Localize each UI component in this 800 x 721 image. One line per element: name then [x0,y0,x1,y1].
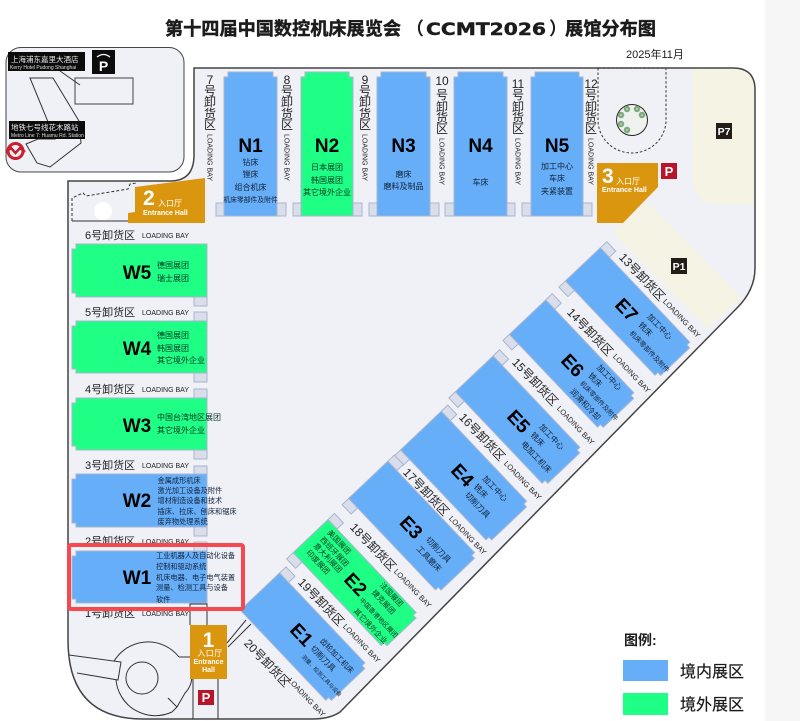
hall E1: 切削刀具 [309,643,338,673]
parking area P1: P1 [673,261,686,273]
hotel label: Kerry Hotel Pudong Shanghai [10,65,76,71]
entrance hall 3: 入口厅 [616,177,640,186]
title: （ [406,19,424,39]
loading bay 12: 区 [585,122,597,136]
east lane labels: 18号卸货区 [347,520,399,574]
panel: venue floor outline [68,68,755,719]
loading bay 9: 号 [359,84,371,98]
loading bay 9: 货 [359,106,371,121]
east lane labels: LOADING BAY [286,676,327,719]
walkway dashed route [72,183,137,221]
hall W2: 激光加工设备及附件 [158,486,222,495]
hall W2: 金属成形机床 [158,476,201,485]
west lane labels: 2号卸货区 [85,534,135,548]
hall W1: 机床电器、电子电气装置 [156,573,235,582]
loading bay 8 [281,73,293,181]
hall E6: 机床零部件及附件 [578,379,621,423]
metro label: Metro Line 7: Huamu Rd. Station [11,133,84,139]
plaza with dashed boundary [598,68,666,153]
hall E3 [342,455,484,599]
loading bay 11: LOADING BAY [514,138,522,185]
hall N2: 其它境外企业 [303,187,351,197]
loading bay 10: 号 [436,88,448,102]
hall E6 [503,294,646,440]
loading bay 7: 卸 [204,94,216,109]
loading bay 9: 区 [359,118,371,132]
hall N5: N5 [545,136,570,157]
east lane labels: 13号卸货区 [616,250,668,304]
hall N4: 车床 [472,177,488,187]
callout: red highlight around W1 [69,545,243,609]
hall W4: W4 [123,339,152,360]
entrance hall 3: Entrance Hall [602,187,647,194]
hall W4: 韩国展团 [157,343,189,353]
loading bay 9: 卸 [359,94,371,109]
icon: parking near entrance 3: P [665,164,674,179]
hall N4: N4 [468,136,493,157]
legend: 图例: [624,632,657,648]
hall N5: 夹紧装置 [541,186,573,196]
entrance hall 2: 2 [143,187,155,210]
loading bay 12: 货 [585,110,597,125]
hall W2: 插床、拉床、刨床和锯床 [158,507,237,516]
east lane labels: LOADING BAY [341,622,382,665]
hall E4: 铣床 [472,482,490,500]
loading bay 8: 货 [281,106,293,121]
east lane labels: LOADING BAY [447,514,488,557]
hall W3: W3 [123,416,151,437]
hall E2: E2 [339,569,371,601]
loading bay 7: 区 [204,118,216,132]
hall W1: 测量、检测工具与设备 [156,583,228,592]
loading bay 8: LOADING BAY [282,134,292,181]
title [165,18,656,40]
loading bay 11: 区 [512,122,524,136]
east lane labels: 17号卸货区 [400,465,452,519]
hall E6: 润滑和冷却 [568,386,603,422]
east lane labels: 20号卸货区 [241,636,293,690]
loading bay 12 [584,77,598,185]
hall E5: 加工中心 [537,422,566,452]
entrance hall 2: 入口厅 [158,199,182,208]
east lane labels [241,250,702,719]
hall E7: 加工中心 [645,311,674,342]
icon: parking near entrance 1: P [202,690,211,705]
hall E7: 铣床 [636,320,655,338]
legend: 境内展区 [680,662,744,681]
hall N1 [223,72,278,216]
east lane labels: 15号卸货区 [509,355,561,409]
entrance hall 2: Entrance Hall [143,210,188,217]
hall W5: 瑞士展团 [157,273,189,283]
hall E3: 工具磨床 [415,543,444,574]
loading bay 11 [512,77,525,185]
loading bay 10: 货 [436,110,448,125]
hall W2: 增材制造设备和技术 [158,496,222,505]
loading bay 10: 10 [435,74,449,88]
hotel label: 上海浦东嘉里大酒店 [11,54,79,64]
entrance hall 1: 入口厅 [197,649,223,658]
hall E4: 加工中心 [480,473,510,503]
loading bay 11: 号 [512,88,524,102]
west lane labels: LOADING BAY [142,537,189,546]
title: CCMT2026 [426,20,546,40]
icon: metro logo [6,144,25,158]
hall E2: 意大利展团 [312,541,345,575]
hall E6: 加工中心 [595,362,624,392]
east lane labels: LOADING BAY [661,297,702,340]
legend: 境外展区 [680,695,744,714]
legend [623,632,744,715]
hall E5: 电加工机床 [519,439,554,475]
loading bay 10: 卸 [436,99,448,114]
parking area P7: P7 [718,126,731,138]
hall N1: 镗床 [242,169,258,179]
west lane labels: 5号卸货区 [85,305,135,319]
east lane labels: LOADING BAY [555,404,596,447]
hall W1: W1 [123,568,152,589]
loading bay 8: 卸 [281,94,293,109]
title: ） [549,19,567,39]
loading bay 9: LOADING BAY [360,134,370,181]
parking area P7 [692,69,754,205]
west lane labels: LOADING BAY [142,231,189,240]
hall E2: 其它境外企业 [352,606,390,646]
title: 第十四届中国数控机床展览会 [165,18,401,39]
hall W4: 其它境外企业 [157,355,205,365]
west lane labels: LOADING BAY [142,385,189,394]
west lane labels: 1号卸货区 [85,606,135,620]
west lane labels: LOADING BAY [142,461,189,470]
west lane labels: 4号卸货区 [85,382,135,396]
hall E2: 印度展团 [304,547,332,576]
hall N2 [301,72,353,216]
entrance hall 3: 3 [602,165,614,188]
hall E3: E3 [395,512,426,544]
hall W2: W2 [123,491,151,512]
hall W3 [72,398,221,450]
west lane labels: 3号卸货区 [85,458,135,472]
loading bay 7: 号 [204,84,216,98]
east lane labels: LOADING BAY [611,352,652,395]
hall N4 [454,72,507,216]
loading bay 11: 货 [512,110,524,125]
title: 展馆分布图 [565,18,656,39]
hall N1: 机床零部件及附件 [223,195,278,204]
hall E2 [287,513,425,655]
loading bay 10: 区 [436,122,448,136]
loading bay 10: LOADING BAY [438,138,446,185]
hall W4 [72,321,207,373]
hall E5: E5 [502,406,534,438]
entrance hall 1: Hall [202,667,215,674]
loading bay 7: LOADING BAY [206,134,214,181]
hall W1 [72,551,235,604]
hall W1: 控制和驱动系统 [156,562,206,571]
east lane labels: 19号卸货区 [295,575,347,629]
hall E2: 法国展团 [378,580,406,608]
hall E5 [449,350,589,492]
hall N3: 磨床 [396,169,412,179]
hall W5 [72,244,207,297]
entrance hall 3 [597,163,658,223]
loading bay squares west [194,297,207,551]
loading bay 7: 货 [204,106,216,121]
hall E4 [394,405,536,549]
loading bay 10 [435,74,449,185]
entrance hall 1: Entrance [194,659,224,666]
hall E1 [240,567,377,706]
entrance hall 1 [190,625,227,679]
panel: hotel and metro inset map [6,48,184,172]
hall W4: 德国展团 [157,330,189,340]
east lane labels: 16号卸货区 [456,410,508,464]
hall W1: 软件 [156,595,170,604]
hall W5: W5 [123,263,152,284]
east lane labels: 14号卸货区 [564,305,616,359]
hall N3 [377,72,430,216]
hall W5: 德国展团 [157,260,189,270]
hall E6: E6 [556,350,588,382]
parking area P1 [613,202,742,328]
icon: hotel parking [92,50,115,74]
hall W2 [72,474,237,527]
loading bay 12: LOADING BAY [586,138,596,185]
hall E2: 美国展团 [325,528,353,556]
east lane labels: LOADING BAY [392,567,433,610]
hall E1: 测量、检测工具与设备 [300,653,344,699]
loading bay 12: 号 [585,88,597,102]
hall N1: 组合机床 [234,182,266,192]
hall N5 [531,72,583,216]
loading bay 8: 号 [281,84,293,98]
hall E2: 西班牙展团 [318,534,351,568]
hall E1: E1 [285,620,317,651]
hall E3: 切削刀具 [424,535,453,565]
hotel label [8,52,85,71]
icon: parking near entrance 1 [198,690,214,705]
hall W2: 废弃物处理系统 [158,517,208,526]
hall W3: 中国台湾地区展团 [157,412,221,422]
hall E6: 铣床 [586,370,604,389]
hall E4: E4 [446,460,478,492]
west lane labels: LOADING BAY [142,609,189,618]
hall E7: E7 [610,295,642,326]
hall N3: 磨料及制品 [384,181,424,191]
hall W3: 其它境外企业 [157,425,205,435]
hall N5: 车床 [549,173,565,183]
hall E5: 铣床 [528,430,547,448]
loading bay 7 [204,73,216,181]
loading bay 12: 卸 [585,99,597,114]
west lane labels [85,228,189,620]
hall E7 [559,242,701,386]
hall N3: N3 [391,136,416,157]
date: 2025年11月 [626,47,684,61]
hall W1: 工业机器人及自动化设备 [156,551,235,560]
hall E2: 捷克展团 [370,587,398,616]
west lane labels: LOADING BAY [142,308,189,317]
loading bay 9: 9 [362,73,369,87]
loading bay 12: 12 [584,77,598,91]
hall N2: N2 [315,136,339,157]
hall N1: N1 [238,136,263,157]
hall N2: 日本展团 [311,162,343,172]
metro label [9,121,85,139]
hall N2: 韩国展团 [311,175,343,185]
west lane labels: 6号卸货区 [85,228,135,242]
hall N5: 加工中心 [541,161,573,171]
loading bay 9 [359,73,371,181]
hall E1: 齿轮加工机床 [318,636,357,676]
entrance hall 2 [128,178,205,223]
entrance hall 1: 1 [203,629,215,652]
hall E7: 机床零部件及附件 [628,329,672,374]
hall E2: 中国香港地区展团 [358,596,400,639]
loading bay 8: 区 [281,118,293,132]
south plaza structures [69,604,251,719]
east lane labels: LOADING BAY [502,459,543,502]
loading bay 11: 11 [512,77,525,91]
hall N1: 钻床 [242,157,258,167]
metro label: 地铁七号线花木路站 [11,122,79,132]
loading bay squares north [216,203,592,216]
loading bay 7: 7 [207,73,214,87]
icon: hotel parking: P [99,58,108,74]
icon: parking near entrance 3 [661,163,677,179]
loading bay 8: 8 [284,73,291,87]
loading bay 11: 卸 [512,99,524,114]
hall E4: 切削刀具 [463,490,492,520]
